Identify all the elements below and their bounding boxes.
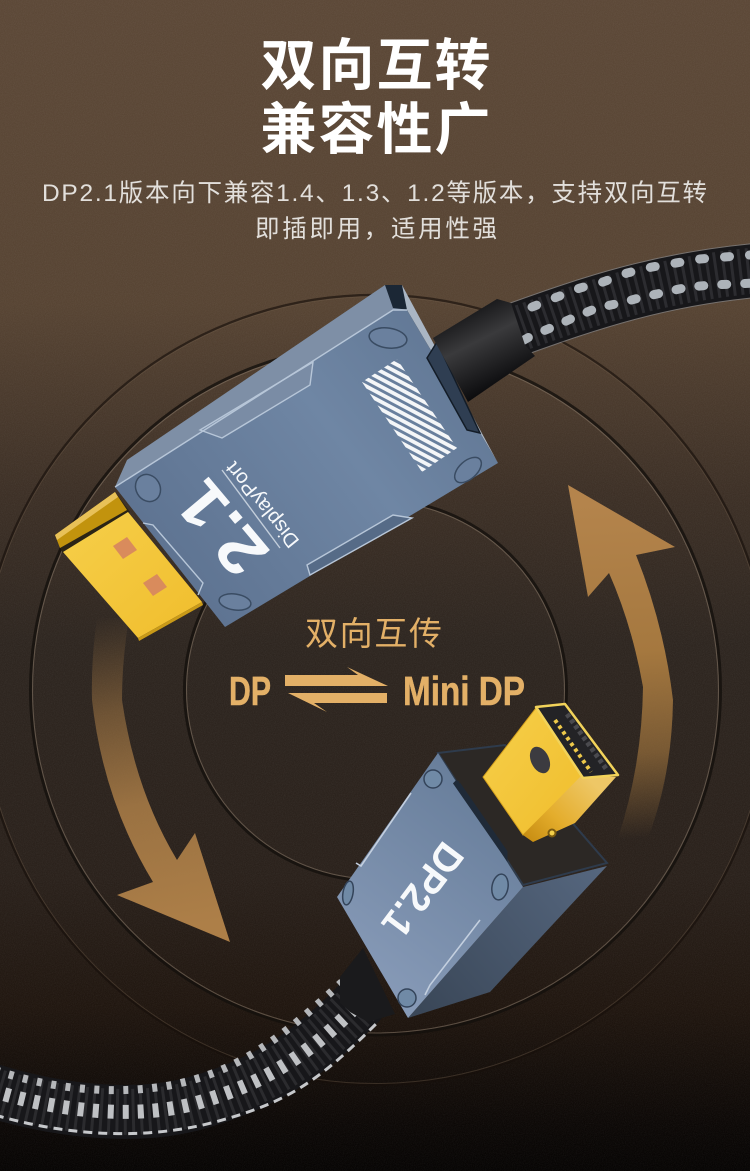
face recess grooves — [115, 310, 412, 595]
gold Mini DP plug — [483, 704, 618, 842]
connector face — [115, 310, 498, 627]
face recess grooves — [356, 782, 505, 995]
bottom strain relief — [340, 948, 395, 1022]
center label: bidirectional transfer: 双向互传 — [305, 615, 442, 652]
locating oval — [526, 744, 554, 776]
subtitle text: 即插即用，适用性强 — [255, 215, 497, 243]
arrow: left, pointing down — [92, 618, 230, 942]
neck recess — [427, 342, 480, 433]
subtitle text: DP2.1版本向下兼容1.4、1.3、1.2等版本，支持双向互转 — [42, 179, 707, 207]
screw hole — [548, 830, 556, 836]
top strain relief — [433, 299, 535, 402]
title: 兼容性广 — [260, 98, 490, 161]
concentric rings — [0, 295, 750, 1085]
screw recesses — [131, 325, 486, 612]
logo: DP2.1: DP2.1 — [373, 834, 472, 945]
connector sides — [115, 285, 407, 487]
arrow: right, pointing up — [568, 485, 675, 838]
connector face — [337, 753, 523, 1018]
hatched stripe mark — [362, 359, 457, 472]
connector rear opening — [438, 745, 607, 885]
bottom braided cable — [0, 982, 380, 1134]
center label: bidirectional transfer — [229, 615, 525, 714]
subtitle text — [42, 179, 707, 243]
top DisplayPort connector — [55, 285, 498, 641]
contact pins — [555, 714, 607, 772]
icon: two-way arrows — [285, 667, 388, 712]
label: Mini DP: Mini DP — [403, 668, 525, 714]
gold plug — [55, 492, 203, 641]
top braided cable — [515, 255, 750, 340]
bottom Mini DP connector — [337, 704, 618, 1018]
screw recesses — [341, 770, 510, 1007]
contact pads — [113, 537, 167, 596]
logo: DisplayPort 2.1: 2.1 — [161, 466, 282, 590]
label: DP: DP — [229, 668, 271, 714]
title: 双向互转 — [260, 34, 490, 97]
logo: DisplayPort 2.1: DisplayPort — [221, 457, 304, 552]
connector side — [408, 866, 607, 1018]
title — [260, 34, 490, 161]
